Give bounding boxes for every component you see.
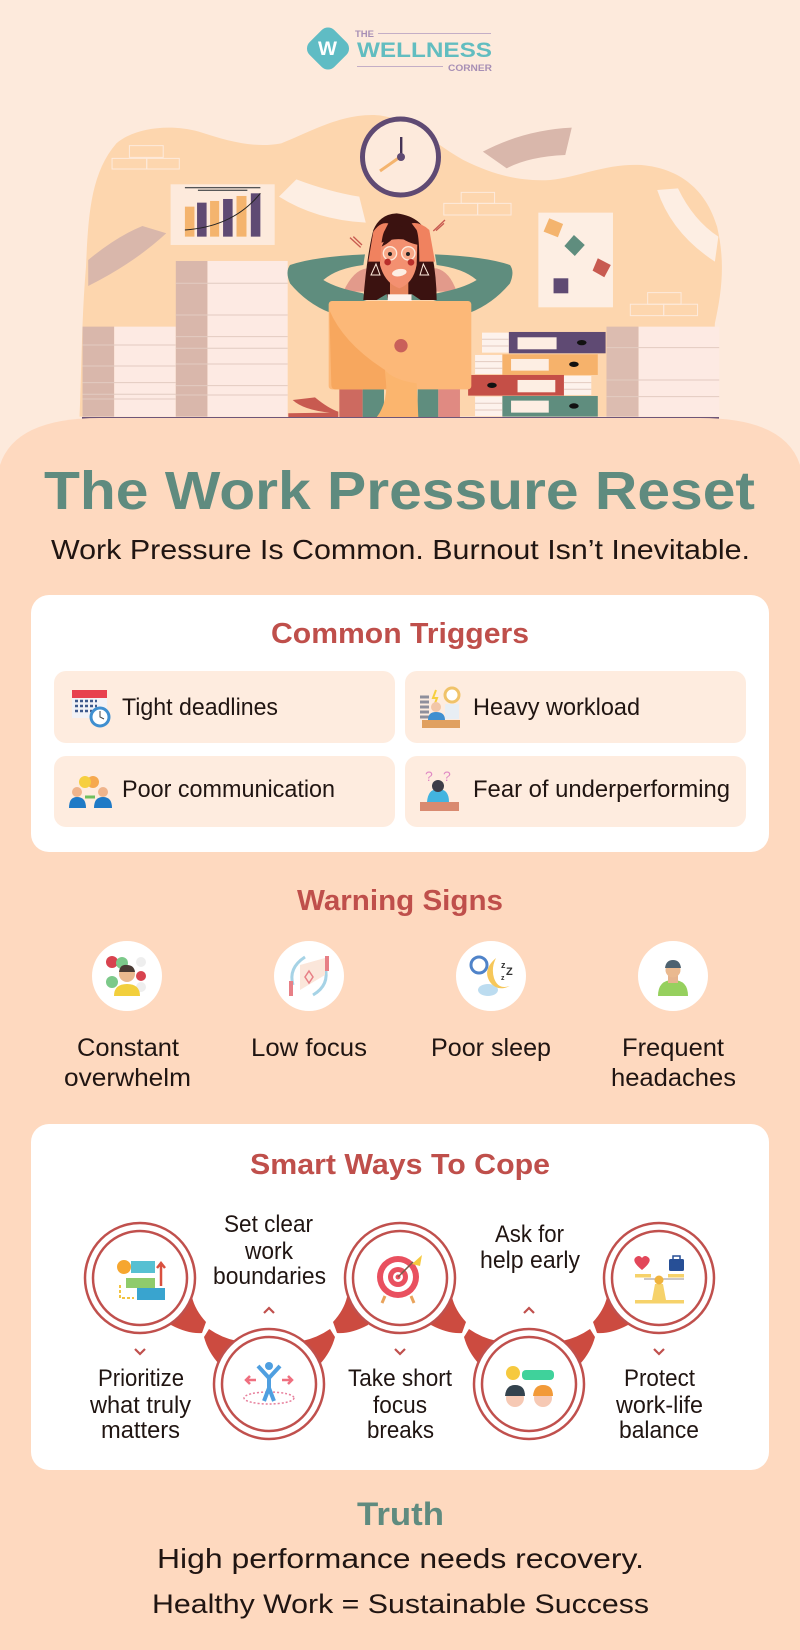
step: ask for help early: help early	[480, 1247, 580, 1274]
warning sign: frequent headaches: Frequent	[622, 1034, 724, 1062]
heading: warning signs: Warning Signs	[297, 885, 503, 917]
footer: truth: Truth	[357, 1496, 444, 1532]
logo: The Wellness Corner	[303, 24, 493, 73]
step: ask for help early: Ask for	[495, 1221, 564, 1248]
warning sign: poor sleep: z	[501, 975, 505, 982]
trigger: fear of underperforming: ?	[443, 768, 451, 784]
footer: truth: Healthy Work = Sustainable Success	[152, 1589, 649, 1619]
step: set clear work boundaries: work	[244, 1238, 294, 1265]
warning sign: poor sleep	[431, 941, 551, 1062]
illustration: stressed woman at laptop in office	[80, 115, 722, 419]
heading: smart ways to cope: Smart Ways To Cope	[250, 1149, 550, 1181]
step: take short focus breaks: focus	[373, 1392, 427, 1419]
trigger: fear of underperforming	[405, 756, 746, 827]
warning sign: frequent headaches	[611, 941, 736, 1092]
step: prioritize what truly matters: matters	[101, 1417, 180, 1444]
footer: truth: High performance needs recovery.	[157, 1543, 644, 1574]
step: protect work-life balance: Protect	[624, 1365, 695, 1392]
trigger: heavy workload	[405, 671, 746, 743]
warning sign: constant overwhelm: Constant	[77, 1034, 179, 1062]
trigger: fear of underperforming: Fear of underperforming	[473, 776, 730, 803]
step: take short focus breaks: Take short	[348, 1365, 452, 1392]
logo: The Wellness Corner: WELLNESS	[357, 39, 492, 62]
trigger: heavy workload: Heavy workload	[473, 694, 640, 721]
trigger: tight deadlines	[54, 671, 395, 743]
title: The Work Pressure Reset	[44, 461, 755, 521]
step: protect work-life balance: work-life	[615, 1392, 703, 1419]
warning sign: low focus: Low focus	[251, 1034, 367, 1062]
warning sign: low focus	[251, 941, 367, 1062]
trigger: tight deadlines: Tight deadlines	[122, 694, 278, 721]
logo: The Wellness Corner: W	[318, 39, 337, 60]
warning sign: poor sleep: Poor sleep	[431, 1034, 551, 1062]
panel: lower background	[0, 418, 800, 1650]
trigger: poor communication	[54, 756, 395, 827]
logo: The Wellness Corner: CORNER	[448, 63, 493, 73]
step: ask for help early	[474, 1221, 584, 1439]
panel: smart ways to cope	[31, 1124, 769, 1470]
step: set clear work boundaries: boundaries	[213, 1263, 326, 1290]
step: prioritize what truly matters: Prioritize	[98, 1365, 184, 1392]
logo: The Wellness Corner: THE	[355, 29, 374, 39]
warning sign: constant overwhelm	[64, 941, 191, 1092]
step: set clear work boundaries	[213, 1211, 326, 1439]
step: set clear work boundaries: Set clear	[224, 1211, 313, 1238]
step: prioritize what truly matters: what truly	[89, 1392, 191, 1419]
heading: common triggers: Common Triggers	[271, 618, 529, 650]
ground line	[82, 417, 719, 419]
icon: wall clock	[362, 119, 438, 195]
step: protect work-life balance	[604, 1223, 714, 1444]
step: prioritize what truly matters	[85, 1223, 195, 1444]
connectors between circles	[160, 1297, 639, 1370]
panel: common triggers	[31, 595, 769, 852]
step: take short focus breaks	[345, 1223, 455, 1444]
step: protect work-life balance: balance	[619, 1417, 699, 1444]
figure: stressed woman	[287, 213, 512, 418]
warning sign: poor sleep: Z	[506, 966, 513, 978]
trigger: fear of underperforming: ?	[425, 768, 433, 784]
warning sign: frequent headaches: headaches	[611, 1064, 736, 1092]
footer: truth	[152, 1496, 649, 1619]
warning sign: constant overwhelm: overwhelm	[64, 1064, 191, 1092]
trigger: poor communication: Poor communication	[122, 776, 335, 803]
step: take short focus breaks: breaks	[367, 1417, 434, 1444]
subtitle: Work Pressure Is Common. Burnout Isn’t Inevitable.	[51, 534, 750, 565]
warning sign: poor sleep: z	[501, 960, 506, 970]
